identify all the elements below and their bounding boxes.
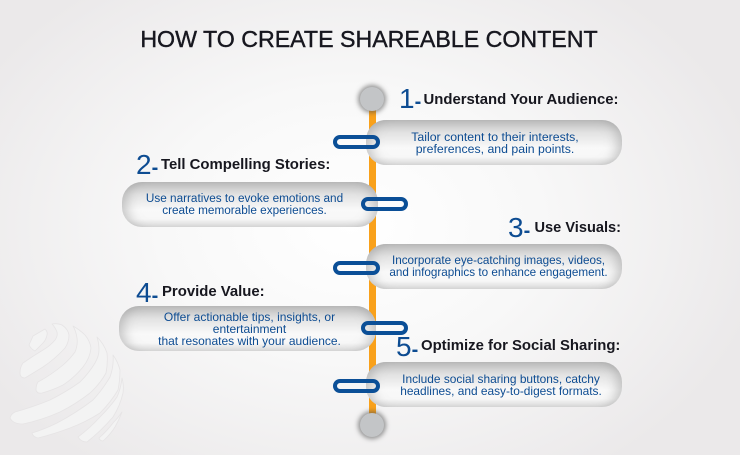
step 4 connector <box>361 321 408 335</box>
step 5 connector <box>333 379 380 393</box>
step 2 pill <box>122 182 378 227</box>
step 4 number: 4- <box>136 277 158 308</box>
step 1 <box>333 83 622 165</box>
step 2 text <box>146 192 343 217</box>
step 4 pill <box>119 306 376 351</box>
step 1 text: Tailor content to their interests, <box>411 130 579 144</box>
step 3 text: Incorporate eye-catching images, videos, <box>392 254 605 267</box>
step 2 text: Use narratives to evoke emotions and <box>146 192 343 205</box>
step 3 connector <box>333 261 380 275</box>
step 3 heading: Use Visuals: <box>534 220 621 236</box>
step 4 heading: Provide Value: <box>162 284 265 300</box>
step 5 text: Include social sharing buttons, catchy <box>402 372 600 386</box>
step 2 text: create memorable experiences. <box>162 204 327 217</box>
step 4 text <box>158 310 341 348</box>
step 3 <box>333 212 622 289</box>
step 3 text: and infographics to enhance engagement. <box>389 266 608 279</box>
step 5 <box>333 331 622 407</box>
timeline end dot <box>360 413 384 437</box>
step 4 text: Offer actionable tips, insights, or <box>164 310 335 324</box>
step 1 pill <box>366 120 622 165</box>
step 2 connector <box>361 197 408 211</box>
timeline start dot <box>360 87 384 111</box>
step 5 text: headlines, and easy-to-digest formats. <box>400 384 602 398</box>
step 5 pill <box>366 362 622 407</box>
timeline: orange vertical line <box>369 100 376 420</box>
step 5 heading: Optimize for Social Sharing: <box>421 338 620 354</box>
step 4 <box>119 277 408 351</box>
step 4 text: entertainment <box>213 322 286 336</box>
title: HOW TO CREATE SHAREABLE CONTENT <box>140 26 598 52</box>
step 1 number: 1- <box>399 83 421 114</box>
step 3 pill <box>366 244 622 289</box>
icon: faded globe watermark <box>10 324 124 442</box>
step 1 text: preferences, and pain points. <box>416 142 574 156</box>
step 5 text <box>400 372 602 398</box>
step 4 text: that resonates with your audience. <box>158 334 341 348</box>
step 1 heading: Understand Your Audience: <box>424 92 618 108</box>
step 5 number: 5- <box>396 331 418 362</box>
step 2 <box>122 149 408 227</box>
step 1 text <box>411 130 579 156</box>
step 3 text <box>389 254 608 279</box>
step 3 number: 3- <box>508 212 530 243</box>
step 1 connector <box>333 135 380 149</box>
step 2 number: 2- <box>136 149 158 180</box>
step 2 heading: Tell Compelling Stories: <box>161 157 330 173</box>
